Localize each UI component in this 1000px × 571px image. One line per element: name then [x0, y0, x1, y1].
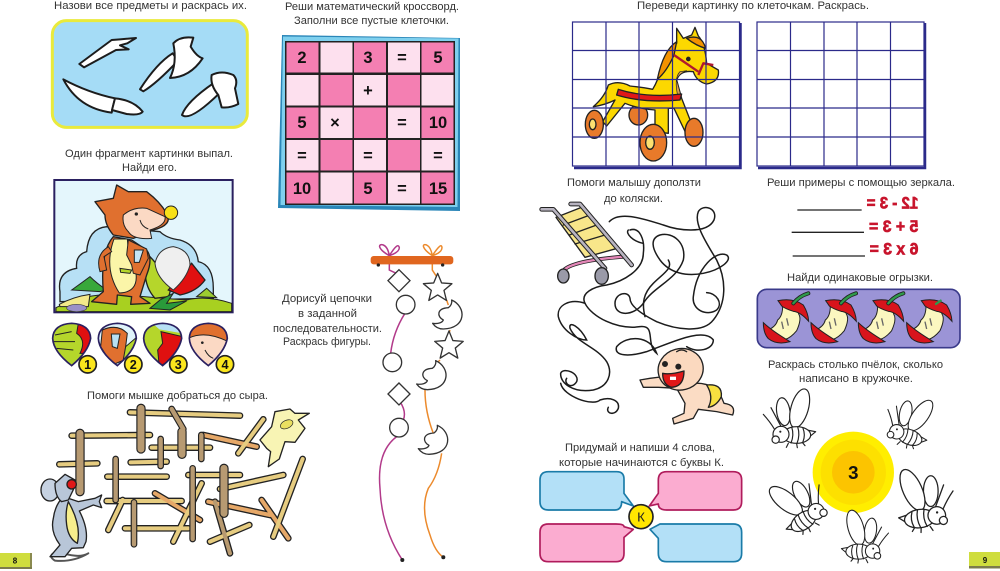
crossword grid: 3 — [363, 49, 373, 67]
number badges: 3 — [175, 358, 182, 372]
heading: copy picture by cells: Переведи картинку по клеточкам. Раскрась. — [637, 0, 869, 12]
text: write four words: которые начинаются с буквы К. — [559, 457, 724, 469]
string end beads — [400, 555, 445, 562]
text: finish the chains — [273, 293, 382, 348]
heading: name the objects: Назови все предметы и раскрась их. — [54, 0, 247, 12]
heading: math crossword: Реши математический кроссворд. — [285, 1, 459, 13]
crossword grid: = — [363, 147, 373, 165]
text: colour bees — [768, 359, 943, 385]
heading: mirror examples: Реши примеры с помощью зеркала. — [767, 177, 955, 189]
number sun — [813, 432, 894, 513]
illustration: hanging shape chains — [371, 245, 463, 562]
text: finish the chains: в заданной — [298, 308, 357, 320]
number badges: 4 — [221, 358, 229, 372]
chart: stick maze — [59, 408, 303, 553]
heading: find same apple cores: Найди одинаковые огрызки. — [787, 272, 933, 284]
bubble: top left — [540, 472, 633, 510]
icon: axe — [140, 37, 203, 91]
number sun: 3 — [848, 462, 859, 483]
text: colour bees: Раскрась столько пчёлок, сколько — [768, 359, 943, 371]
bees — [760, 386, 958, 563]
number badges: 2 — [130, 358, 137, 372]
speech bubbles around letter — [540, 472, 742, 562]
crossword grid: = — [397, 49, 407, 67]
page number badge: 8: 8 — [13, 556, 18, 566]
fragment 1 — [52, 323, 92, 367]
left chain shapes — [383, 270, 415, 437]
text: finish the chains: Дорисуй цепочки — [282, 293, 372, 305]
text: write four words: Придумай и напиши 4 слова, — [565, 442, 715, 454]
maze: tangled path — [558, 208, 728, 413]
chain strings — [380, 245, 450, 560]
page number badge: 9: 9 — [983, 556, 988, 565]
crossword grid: 5 — [363, 180, 373, 198]
mirrored equations: 12 - 3 = — [866, 194, 918, 213]
text: help the baby — [567, 177, 701, 205]
text: one fragment fell out: Один фрагмент картинки выпал. — [65, 148, 233, 160]
text: help the baby: до коляски. — [604, 193, 663, 205]
hanging bar — [371, 256, 453, 267]
crossword grid: + — [363, 82, 373, 100]
panel: apple cores — [757, 289, 960, 348]
text: finish the chains: Раскрась фигуры. — [283, 336, 371, 348]
crossword grid: 10 — [293, 180, 311, 198]
icon: cheese — [260, 409, 309, 467]
page number badge: 8 — [0, 553, 32, 569]
heading: help the mouse: Помоги мышке добраться до сыра. — [87, 390, 268, 402]
bubble: bottom left — [540, 524, 633, 562]
crossword grid: 5 — [297, 114, 307, 132]
crossword grid: 5 — [433, 49, 443, 67]
heading: math crossword — [285, 1, 459, 27]
crossword grid: = — [297, 147, 307, 165]
icon: knife — [63, 79, 143, 114]
crossword grid: = — [433, 147, 443, 165]
text: one fragment fell out: Найди его. — [122, 162, 177, 174]
text: colour bees: написано в кружочке. — [799, 373, 913, 385]
fragments: four picture pieces — [52, 323, 234, 373]
fragment 2 — [97, 323, 137, 367]
icon: hammer — [182, 72, 238, 116]
crossword grid: × — [330, 114, 340, 132]
text: write four words — [559, 442, 724, 469]
grid: copy source with horse — [572, 22, 740, 168]
illustration: toy horse — [585, 27, 718, 161]
mirrored equations: 5 + 3 = — [869, 217, 918, 236]
number badges: 1 — [84, 358, 91, 372]
letter badge: К — [637, 509, 645, 524]
page number badge: 9 — [969, 552, 1000, 568]
text: finish the chains: последовательности. — [273, 323, 382, 335]
text: one fragment fell out — [65, 148, 233, 174]
crossword grid — [278, 35, 460, 211]
icon: pliers — [79, 38, 136, 67]
illustration: mouse — [41, 474, 102, 561]
heading: math crossword: Заполни все пустые клеточки. — [294, 15, 449, 27]
bubble: bottom right — [650, 524, 742, 562]
grid: empty copy target — [757, 22, 925, 168]
panel: tools — [52, 21, 247, 127]
mirrored equations: 6 x 3 = — [869, 240, 918, 259]
fragment 3 — [143, 323, 183, 367]
text: help the baby: Помоги малышу доползти — [567, 177, 701, 189]
crossword grid: 2 — [297, 49, 307, 67]
right chain shapes — [417, 273, 463, 454]
apple cores row — [763, 293, 952, 343]
letter badge — [629, 505, 653, 529]
crossword grid: 10 — [429, 114, 447, 132]
bubble: top right — [649, 472, 742, 510]
illustration: stroller — [542, 204, 632, 284]
fragment 4 — [188, 323, 228, 367]
number badges — [79, 356, 234, 373]
illustration: crawling baby — [640, 343, 734, 424]
crossword grid: 15 — [429, 180, 447, 198]
crossword grid: = — [397, 180, 407, 198]
mirrored equations — [792, 194, 918, 259]
crossword grid: = — [397, 114, 407, 132]
picture: fox with ball — [54, 180, 233, 312]
